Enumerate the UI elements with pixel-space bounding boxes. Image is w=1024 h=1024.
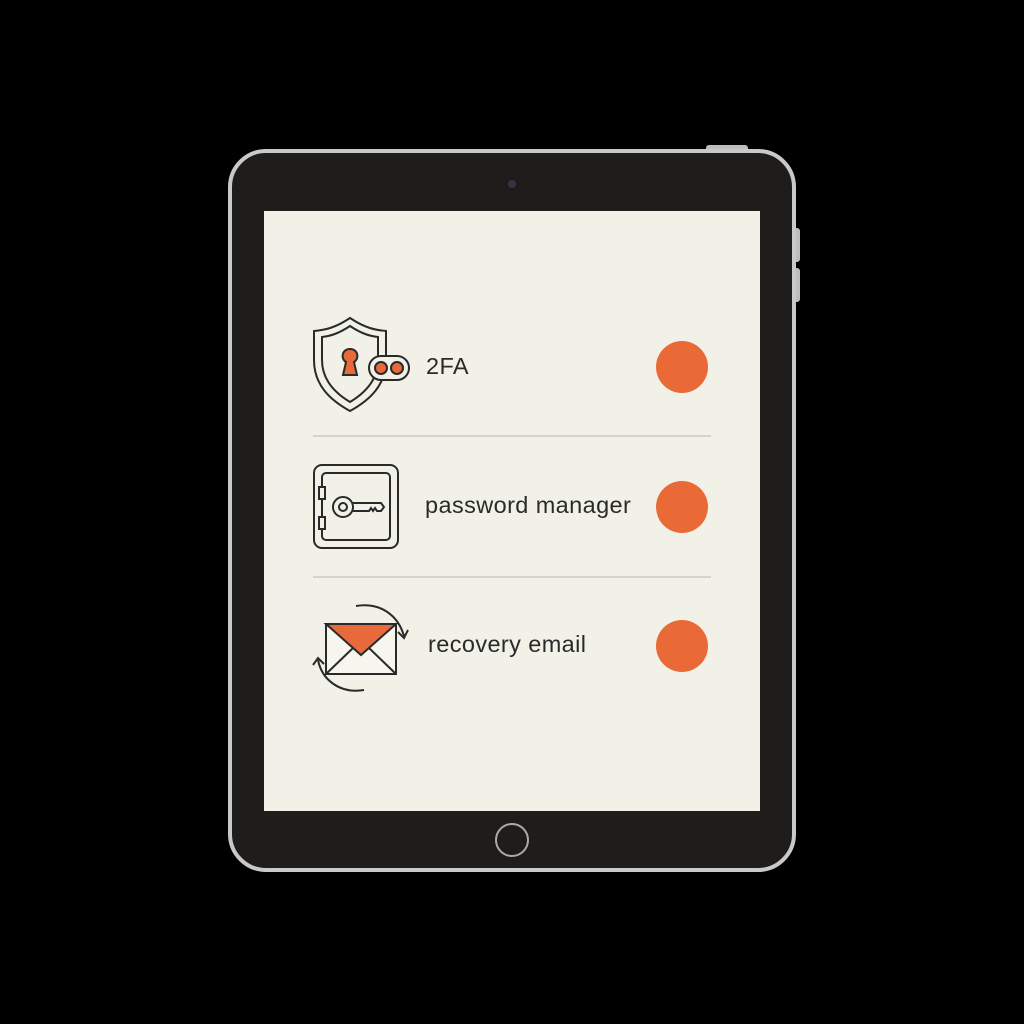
screen — [264, 211, 760, 811]
label: 2FA: 2FA — [426, 353, 469, 379]
label: password manager: password manager — [425, 492, 631, 518]
icon: shield with keyhole — [314, 318, 409, 411]
home button — [496, 824, 528, 856]
side buttons — [706, 145, 800, 302]
icon: envelope with arrows — [313, 605, 408, 691]
icon: safe with key — [314, 465, 398, 548]
tablet frame — [230, 151, 794, 870]
camera — [508, 180, 516, 188]
status dots — [656, 341, 708, 672]
label: recovery email: recovery email — [428, 631, 586, 657]
